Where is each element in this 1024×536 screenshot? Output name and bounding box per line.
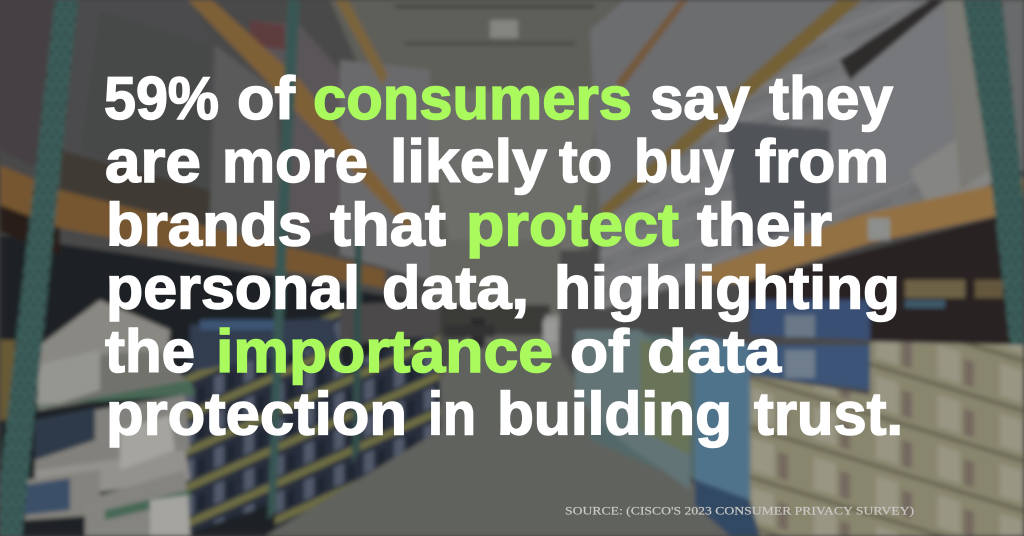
persil boxes bbox=[25, 300, 195, 536]
line 1: of bbox=[237, 65, 296, 132]
navy product stacks bbox=[180, 300, 440, 536]
right blue product stacks bbox=[575, 300, 870, 536]
line 4 bbox=[106, 254, 900, 322]
line 5: the bbox=[105, 318, 195, 385]
line 5 bbox=[105, 318, 782, 385]
line 6: trust. bbox=[754, 380, 903, 448]
line 5: data bbox=[647, 318, 782, 385]
line 1: they bbox=[769, 65, 894, 132]
line 6: building bbox=[497, 380, 732, 448]
left rack uprights bbox=[0, 0, 362, 536]
line 5: importance bbox=[216, 318, 553, 385]
line 2: from bbox=[755, 128, 889, 195]
line 3 bbox=[106, 192, 832, 258]
line 5: of bbox=[570, 318, 630, 385]
right shelf labels bbox=[905, 280, 1003, 308]
line 4: highlighting bbox=[554, 254, 900, 322]
line 3: protect bbox=[466, 192, 679, 258]
line 2 bbox=[105, 128, 889, 195]
line 6 bbox=[106, 380, 903, 448]
beige boxes bbox=[750, 342, 1024, 536]
line 2: are bbox=[105, 128, 201, 195]
line 6: protection bbox=[106, 380, 407, 448]
people in aisle bbox=[445, 318, 557, 348]
line 1: say bbox=[650, 65, 751, 132]
headline bbox=[104, 65, 903, 448]
line 6: in bbox=[428, 380, 476, 448]
left upper pallet boxes bbox=[0, 0, 430, 280]
line 2: to bbox=[559, 128, 612, 195]
line 1: 59% bbox=[104, 65, 219, 132]
line 4: personal bbox=[106, 254, 360, 322]
right beams bbox=[600, 0, 1024, 283]
right rack upright bbox=[963, 0, 1024, 345]
floor bbox=[262, 330, 770, 536]
line 1 bbox=[104, 65, 894, 132]
source citation: SOURCE: (CISCO'S 2023 CONSUMER PRIVACY SURVEY) bbox=[565, 506, 914, 518]
aisle far end bbox=[430, 240, 560, 355]
line 3: that bbox=[330, 192, 446, 258]
left lower dark shelves bbox=[0, 235, 440, 536]
line 3: their bbox=[697, 192, 832, 258]
right dark shelf gap bbox=[740, 210, 1024, 345]
line 2: buy bbox=[634, 128, 735, 195]
left beams bbox=[0, 0, 412, 420]
line 2: likely bbox=[390, 128, 548, 195]
line 4: data, bbox=[382, 254, 529, 322]
line 1: consumers bbox=[313, 65, 632, 132]
right upper pallet boxes bbox=[590, 0, 1024, 310]
line 2: more bbox=[222, 128, 368, 195]
ceiling bbox=[330, 0, 680, 250]
line 3: brands bbox=[106, 192, 312, 258]
